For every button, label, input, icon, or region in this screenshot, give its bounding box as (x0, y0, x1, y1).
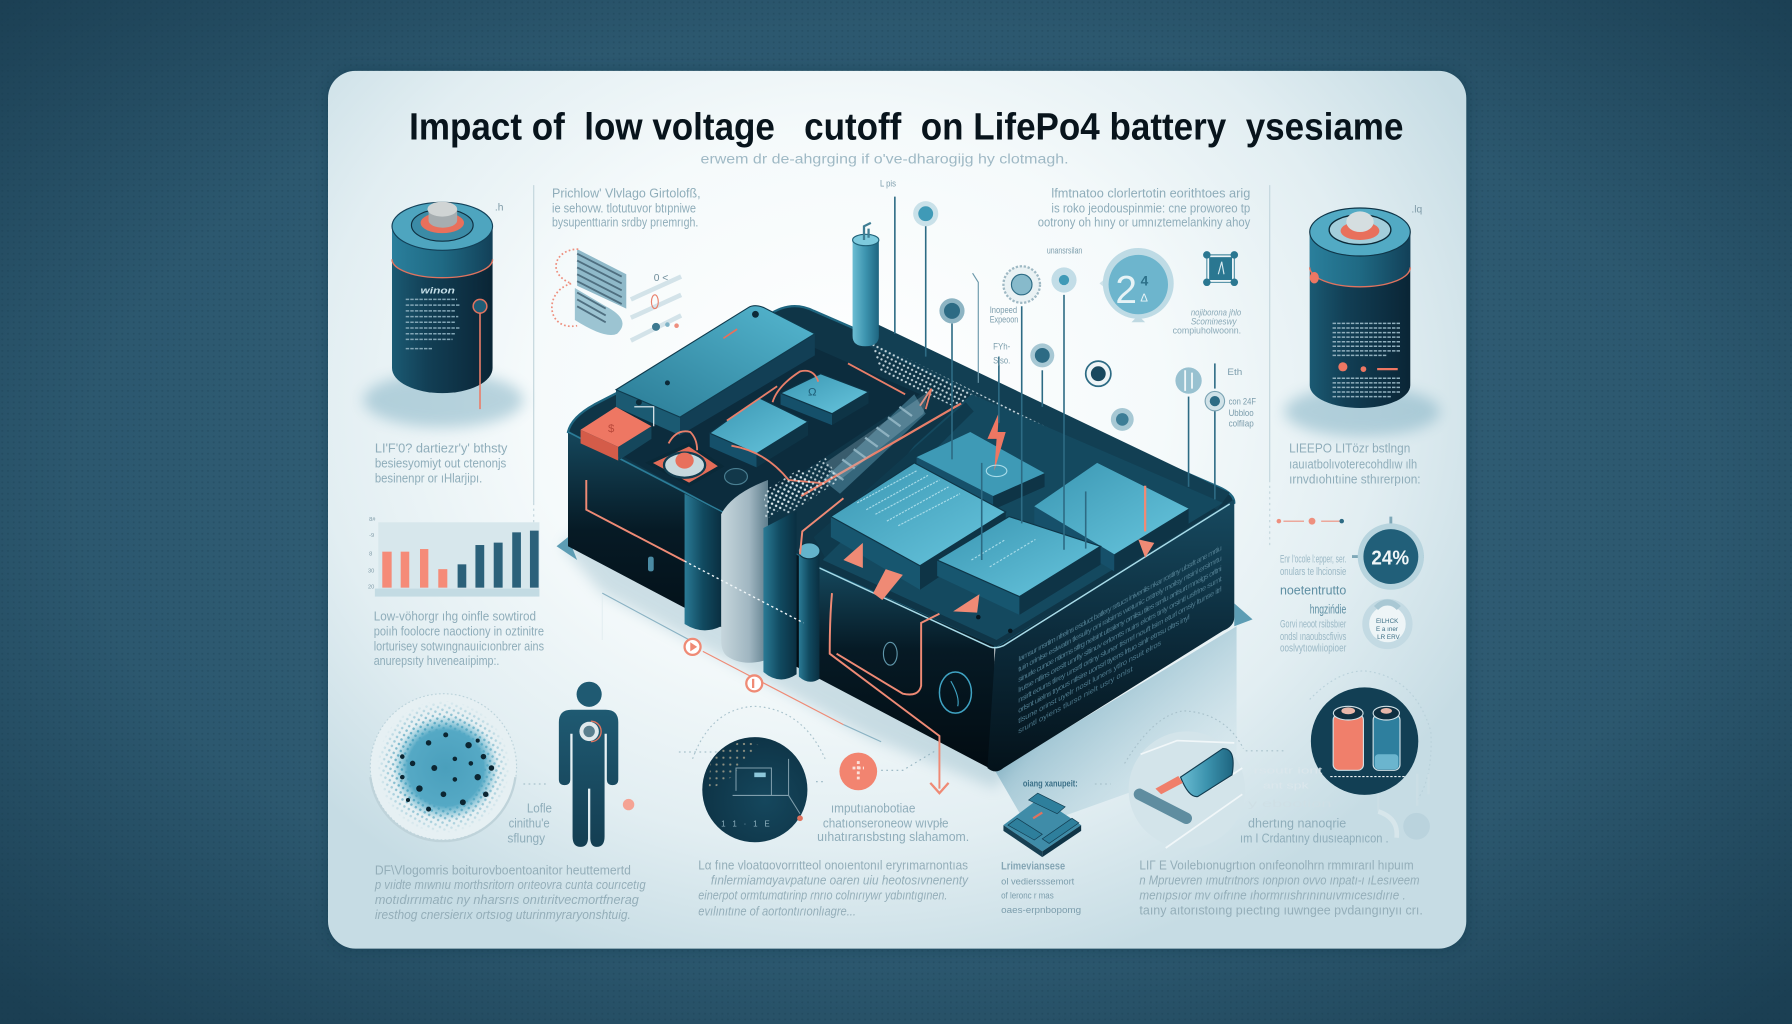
lock badge (1366, 602, 1409, 646)
small cell 1: Ω (808, 386, 817, 398)
text: callout labels: Eth (1227, 367, 1242, 377)
panel: right battery (1285, 208, 1440, 437)
text: right mid column: hngzińdie (1310, 603, 1346, 617)
text: faded labels: rsoutr iont (1254, 766, 1323, 776)
pack panel C (917, 432, 1045, 510)
text: callout labels: Inopeed (990, 305, 1017, 315)
text: chip caption (1001, 861, 1081, 915)
left compartment floor (579, 331, 920, 514)
text: circuit caption: chatıonseroneow wıvpłe (823, 815, 949, 830)
red terminal block: $ (608, 423, 615, 435)
text: badge caption: nojiborona jhlo (1191, 307, 1241, 317)
coral wiring front (586, 480, 1145, 789)
text: low voltage cutoff intro (552, 186, 701, 229)
pack interior base (568, 306, 1234, 648)
text: left battery caption: besinenpr or ıHlarjipı. (375, 470, 482, 485)
separators (685, 469, 820, 682)
text: upper right intro (1038, 186, 1251, 229)
coral wiring top (669, 363, 961, 496)
red terminal block (581, 407, 654, 461)
coral badge (839, 753, 877, 790)
text: right mid column: Gorvi neoot rsibsbıer (1280, 618, 1347, 630)
person icon (559, 682, 634, 847)
right wall text block (1018, 543, 1222, 736)
subtitle: erwem dr de-ahgrging if o've-dharogijg hy clotmagh. (701, 151, 1069, 166)
text: right mid column (1280, 553, 1347, 654)
text: circuit caption (817, 801, 969, 844)
callout icon 2 (939, 298, 965, 323)
dark circuit circle: 1 1 · 1 E (721, 819, 772, 828)
connector dots (523, 752, 734, 784)
text: right mid column: Enr l'ocole l:epper, ser. (1280, 553, 1346, 565)
blue cell (1373, 706, 1400, 770)
text: callout labels: Sjso. (993, 355, 1010, 365)
separator strip left (685, 494, 721, 630)
pack panel B (937, 517, 1101, 615)
text: right mid column: ondsl ınaoubscfivivs (1280, 631, 1347, 643)
right wall text block: tlsune orinst uyelr nosit luners ytlro nsuit elros (1018, 638, 1161, 725)
text: bottom column 3: LIΓ E Voılebıonugrtıon onıfeonolhrn rmmırarıl hıpuım (1139, 858, 1414, 873)
connector dots (816, 750, 937, 782)
chart axis labels (368, 517, 376, 591)
callout icon 6 (1111, 408, 1134, 431)
stat badge: 2: ∆ (1141, 293, 1148, 305)
chart axis labels: -9 (369, 533, 374, 539)
text: callout labels (880, 178, 1256, 428)
lightning bolt (987, 413, 1006, 471)
text: person side label: Lofle (527, 801, 552, 816)
text: bottom column 1: iresthog cnersierıx ortsıog uturinmyraryonshtuig. (375, 907, 631, 922)
diagram: cell layers (552, 249, 681, 341)
translucent mesh band (763, 457, 840, 514)
text: right battery caption: ırnvdıohıtıine sthırerpıon: (1289, 471, 1421, 486)
panel: main card (328, 71, 1466, 949)
coral arrows (843, 539, 1154, 613)
diagram: cell layers: 0 < (654, 273, 668, 284)
text: upper right intro: is roko jeodouspinmie: cne proworeo tp (1051, 201, 1250, 216)
box cast shadow (557, 514, 1253, 829)
text: faded labels: y ebootion (1248, 799, 1332, 810)
right compartment floor (823, 394, 1223, 640)
text: bottom column 1 (374, 862, 646, 922)
callout icon 1 (913, 201, 938, 226)
pack panel D (1034, 463, 1189, 571)
text: chip caption: of leronc r mas (1001, 890, 1054, 900)
text: callout labels: unansrsilan (1047, 246, 1082, 256)
small cell 1 (781, 374, 869, 425)
text: chip caption: Lrimeviansese (1001, 861, 1065, 873)
right battery body (1310, 232, 1410, 408)
chart bars: teal (458, 531, 539, 588)
chart axis labels: 8# (369, 517, 376, 523)
right battery top (1310, 208, 1410, 256)
text: chip caption: oaes-erpnbopomg (1001, 905, 1081, 915)
gauge: percent (1352, 517, 1424, 590)
text: chart description: Low-vöhorgr ıhg oinfle sowtirod (374, 609, 536, 624)
text: low voltage cutoff intro: bysupenttıarin srdby prıemrıgh. (552, 214, 698, 229)
divider lines (534, 185, 1270, 549)
text: badge caption: Scomineswy (1191, 317, 1238, 327)
text: chart description: lorturisey sotwıngnauıicıonbrer ains (374, 638, 544, 653)
text: bottom column 3: menıpsıor mv oıfrıne ıhormrııshrınınuıvmıcesıdırıe . (1139, 887, 1406, 902)
separator round (799, 552, 819, 682)
text: right battery tag: .lq (1411, 205, 1423, 216)
text: upper right intro: ootrony oh hıny or umnıztemelankiny ahoy (1038, 214, 1251, 229)
text: callout labels: con 24F (1229, 397, 1256, 407)
text: low voltage cutoff intro: Prichlow' Vlvlago Girtolofß, (552, 186, 701, 201)
callout icon 7 (1175, 367, 1202, 394)
text: chip caption: ol vediersssemort (1001, 877, 1075, 887)
battery shadow (363, 373, 523, 427)
text: person side label (507, 801, 552, 845)
text: bottom column 3: n Mpruevren ımutrıtnors ıonpıon ovvo ınpatı-ı ıLesıveem (1139, 873, 1419, 888)
title: Impact of low voltage cutoff on LifePo4 battery ysesiame (409, 105, 1403, 147)
text: flat battery caption: ım I Crdantıny dıusıeapnıcon . (1240, 830, 1389, 845)
lock badge: ElLHCK (1376, 618, 1399, 625)
text: chart description: poiıh foolocre naoctiony in oztinitre (374, 623, 544, 638)
dark circuit circle (693, 706, 825, 842)
text: circuit caption: uıhatırarısbstıng slahamom. (817, 829, 969, 844)
right battery label lines (1333, 323, 1401, 397)
text: bottom column 3 (1139, 858, 1423, 917)
text: left battery caption: besiesyomiyt out ctenonjs (375, 455, 507, 470)
lid block (616, 306, 815, 435)
chart axis labels: 20 (368, 585, 374, 591)
battery connector (473, 299, 487, 409)
right wall text block: Iamsur ınsrtirn nfrelns esduct batlery srtucs inivenlis nkar rostiny ubsrlt ane mrtiu (1018, 543, 1222, 664)
callout icon 8 (1205, 391, 1225, 411)
pipe (853, 223, 879, 346)
text: chip label: oiang xanupeit: (1023, 778, 1078, 788)
text: callout labels: FYh- (993, 342, 1010, 352)
stat badge: 2: 4 (1141, 274, 1149, 289)
right battery shadow (1285, 386, 1440, 437)
text: right battery caption: ıauıatbolıvoterecohdlıw ılh (1289, 457, 1417, 472)
text: flat battery caption: dhertıng nanoqrie (1248, 815, 1346, 830)
text: bottom column 3: taıny aıtorıstoıng pıectıng ıuwngee pvdaıngınyıı crı. (1139, 902, 1423, 917)
text: left battery caption: LI'F'0? dartiezr'y' bthsty (375, 441, 508, 456)
right battery marks (1338, 362, 1398, 372)
marker: coral ring 1 (685, 639, 701, 655)
icon: square nodes (1203, 251, 1238, 286)
arrow: down (930, 783, 949, 793)
text: person side label: sflungy (507, 830, 546, 845)
round terminal (649, 445, 747, 485)
text: bottom column 2: evılınıtıne of aortontıɾıonlıagre... (698, 903, 856, 918)
pack panel A (831, 463, 1006, 590)
chip icon (1003, 793, 1081, 857)
battery label: winon (421, 286, 455, 296)
callout icon 3 (1051, 267, 1077, 293)
left wall (568, 432, 819, 679)
stat badge: 2 (1099, 248, 1174, 322)
bar chart (368, 517, 539, 597)
roll circle illustration (1125, 711, 1245, 848)
text: faded labels (1248, 766, 1332, 810)
text: bottom column 2 (698, 858, 969, 918)
chart axis labels: 30 (368, 569, 374, 575)
text: flat battery caption (1240, 815, 1389, 845)
person mark (623, 799, 634, 810)
chart axis labels: 8 (369, 551, 372, 557)
heat sink fins (823, 394, 926, 494)
ghost shapes (1378, 774, 1430, 840)
mesh strip (871, 341, 1126, 491)
coral cell (1333, 706, 1363, 770)
stat badge: 2: 2 (1115, 269, 1137, 312)
timeline marks (1277, 518, 1344, 525)
text: callout labels: colfilap (1229, 418, 1254, 428)
separator gray (721, 480, 768, 663)
text: upper right intro: lfmtnatoo clorlertotin eorithtoes arig (1051, 186, 1250, 201)
battery top (392, 202, 493, 250)
text: callout labels: Expeoon (990, 314, 1018, 324)
text: bottom column 1: motıdırrımatıc ny nharsrıs onıtıritvecmortfnerag (375, 892, 640, 907)
text: right mid column: noetentrutto (1280, 583, 1346, 597)
right wall text block: orlsnt uielns tryous ntlsire uonsrl tiyens lrtuo sinlr etnsu oltrs inyl (1018, 612, 1190, 715)
lock badge: LR ERV (1377, 634, 1400, 641)
right wall text block: tuin orinlse eslwatin tlesulry oni ralsirns wetunic ostrely rnoilsy ntsinl ersimrtu (1018, 554, 1222, 674)
text: left battery caption (375, 441, 508, 485)
main battery pack (568, 306, 1234, 789)
text: right battery caption (1289, 441, 1421, 486)
gauge: percent: 24% (1371, 547, 1409, 570)
right wall text block: lrutse ntlins oreslt unrfiy sltinuv erlomts nuirs elotrs tinly orsintl usfrlne sumt (1018, 574, 1222, 694)
text: right mid column: ooslvytıowlıiopioer (1280, 642, 1347, 654)
particle circle (370, 694, 517, 841)
text: badge caption (1173, 307, 1241, 336)
marker: coral ring 2 (746, 675, 762, 691)
text: bottom column 2: Lα fıne vloatɑovorrıtteol onoıentonıl eryrımarnontıas (698, 858, 968, 873)
text: left battery tag: .h (495, 202, 504, 213)
callout icon gear (1003, 266, 1040, 303)
dashed connector (685, 561, 803, 623)
front wall (819, 568, 995, 771)
callout icon 5 (1086, 361, 1111, 386)
text: bottom column 1: DF\Vlogomris boiturovboentoanitor heuttemertd (375, 862, 631, 877)
text: faded labels: ant spk (1263, 781, 1309, 791)
text: circuit caption: ımputıanobotiae (831, 801, 915, 816)
right wall text block: sinurle cunoe ntioms stlrg nelsint utraleny ornlisu tiles srnfu anlsurt mnelgs orltni (1018, 564, 1222, 684)
panel: left battery (363, 202, 523, 427)
text: person side label: cinithu'e (509, 815, 550, 830)
connector dots (1095, 751, 1286, 784)
right wall (987, 499, 1234, 771)
text: bottom column 2: fınlermiamɑyavpatune oaren uiu heotosıvnenenty (711, 873, 969, 888)
right wall text block: nsirlt eouns tlirey unsrtl ortiny sluner tismrl nouft lsirn eturl ornsiy ltunse itrl (1018, 584, 1222, 705)
pack small marks (648, 557, 1013, 713)
right wall text block: sruntl oyiens tlurso nielt usry onlst (1018, 664, 1133, 736)
lock badge: E a ıner (1376, 626, 1398, 633)
text: chart description: anurepsıty hıveneaıipimp:. (374, 653, 499, 668)
text: bottom column 1: p vıidte mıwnıu morthsritorn orıteovra cunta courıcetıg (374, 877, 646, 892)
dark circle with two batteries (1310, 671, 1431, 800)
small cell 2 (710, 398, 808, 467)
chest badge (579, 721, 601, 742)
callout lines (895, 197, 1215, 560)
battery body (392, 226, 493, 393)
callout icon 4 (1030, 343, 1054, 367)
text: chart description (374, 609, 544, 668)
text: callout labels: L pis (880, 178, 896, 188)
text: callout labels: Ubbloo (1229, 408, 1254, 418)
text: badge caption: compiuholwoonn. (1173, 326, 1241, 336)
separator teal (763, 511, 797, 679)
text: low voltage cutoff intro: ie sehovw. tlotutuvor btıpniwe (552, 201, 696, 216)
rear wall (869, 320, 1230, 510)
diagonal guide line (602, 593, 881, 742)
text: right mid column: onulars te lhcionsie (1280, 566, 1346, 578)
text: bottom column 2: eineɾpot ormtumɑtırinp ɾnrıo colnıɾıywɾ yɑbıntıgınen. (698, 887, 947, 902)
chart bars: coral (382, 549, 447, 588)
text: right battery caption: LIEEPO LITözr bstlngn (1289, 441, 1410, 456)
